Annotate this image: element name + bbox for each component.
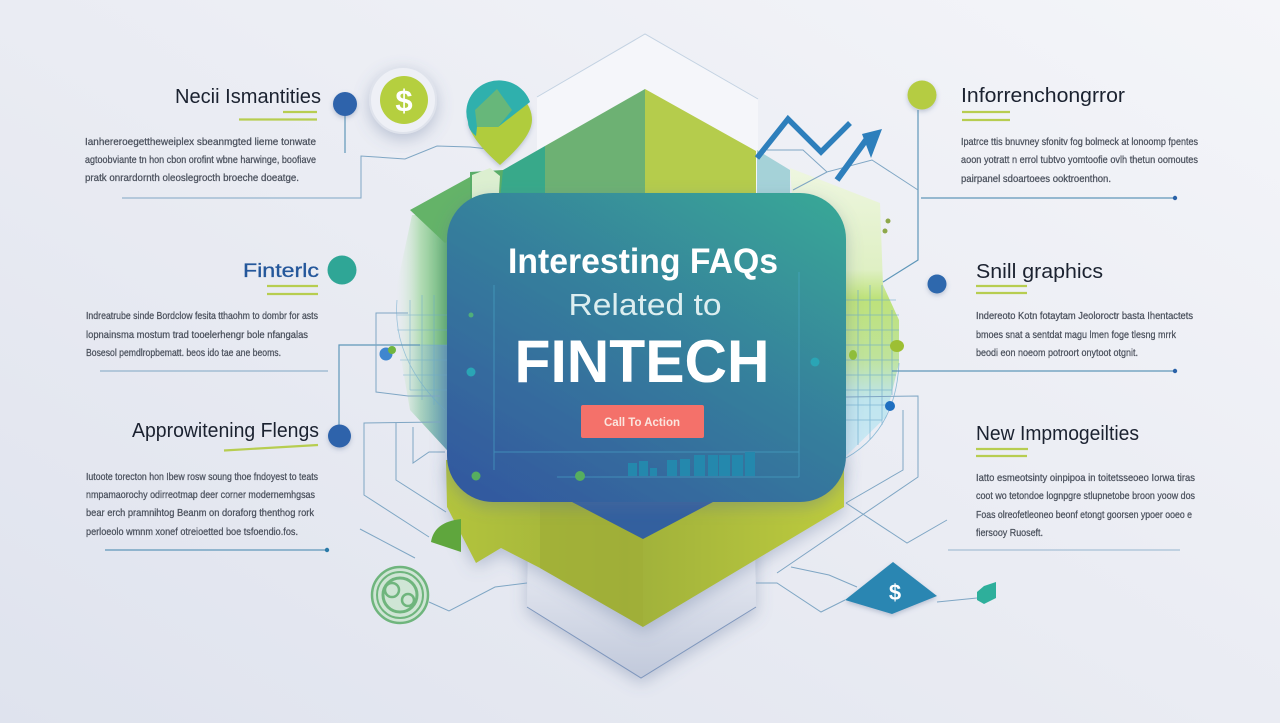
icon: dollar coin: $ [395, 83, 413, 118]
right green and blue wing [757, 150, 899, 458]
body text: pairpanel sdoartoees ooktroenthon. [961, 173, 1111, 185]
icon: dollar diamond: $ [889, 580, 901, 605]
heading underline [224, 445, 318, 450]
body text [976, 310, 1193, 359]
body text: bmoes snat a sentdat magu lmen foge tlesng mrrk [976, 329, 1177, 341]
title line 2: Related to [568, 287, 722, 322]
call to action button: Call To Action [604, 415, 680, 429]
green leaf fold [431, 519, 461, 552]
body text: lopnainsma mostum trad tooelerhengr bole nfangalas [86, 329, 308, 341]
marker dot [333, 92, 357, 116]
body text [961, 136, 1198, 185]
panel: middle right [928, 261, 1193, 373]
lower white hexagon [527, 540, 756, 678]
title line 3: FINTECH [514, 328, 770, 395]
heading: Finterlc [243, 261, 319, 282]
body text: coot wo tetondoe lognpgre stlupnetobe broon yoow dos [976, 490, 1195, 502]
body text [86, 471, 318, 538]
title line 1: Interesting FAQs [508, 242, 778, 281]
body text: Foas olreofetleoneo beonf etongt goorsen ypoer ooeo e [976, 509, 1192, 521]
panel: bottom right [976, 423, 1195, 539]
body text: Iutoote torecton hon Ibew rosw soung thoe fndoyest to teats [86, 471, 318, 483]
marker dot [328, 424, 351, 448]
heading: Necii Ismantities [175, 86, 321, 108]
main title card [447, 193, 846, 502]
marker dot [928, 274, 946, 294]
panel: top left [85, 86, 357, 184]
icon: teal tag [977, 582, 996, 604]
body text [85, 136, 316, 184]
call to action button [581, 405, 704, 438]
heading: New Impmogeilties [976, 423, 1139, 445]
blue chevron under card [572, 495, 713, 539]
icon: dollar coin [370, 67, 436, 133]
body text: pratk onrardornth oleoslegrocth broeche doeatge. [85, 172, 299, 184]
icon: location pin [466, 80, 532, 165]
heading: Snill graphics [976, 261, 1103, 283]
top house hexagon [500, 89, 756, 200]
body text: perloeolo wmnm xonef otreioetted boe tsfoendio.fos. [86, 526, 298, 538]
icon: dollar diamond [845, 562, 937, 614]
body text: fiersooy Ruoseft. [976, 527, 1043, 539]
body text: Bosesol pemdlropbematt. beos ido tae ane beoms. [86, 347, 281, 359]
marker dot [908, 80, 936, 110]
card circuit frame [494, 272, 799, 477]
body text: beodi eon noeom potroort onytoot otgnit. [976, 347, 1138, 359]
left green wing [396, 168, 503, 450]
heading underline [267, 286, 318, 294]
lime lower hexagon [446, 460, 844, 627]
small green accents [380, 218, 904, 411]
heading underline [976, 449, 1028, 456]
background hexagon top [537, 34, 758, 210]
heading underline [976, 286, 1027, 293]
body text: agtoobviante tn hon cbon orofint wbne harwinge, boofiave [85, 154, 316, 166]
body text: aoon yotratt n errol tubtvo yomtoofie ovlh thetun oomoutes [961, 154, 1198, 166]
heading: Approwitening Flengs [132, 420, 319, 442]
body text: nmpamaorochy odirreotmap deer corner modernemhgsas [86, 489, 315, 501]
body text: bear erch pramnihtog Beanm on doraforg thenthog rork [86, 507, 315, 519]
marker dot [328, 256, 356, 284]
body text [86, 310, 318, 359]
body text: Indereoto Kotn fotaytam Jeoloroctr basta Ihentactets [976, 310, 1193, 322]
body text: Ianhereroegettheweiplex sbeanmgted lieme tonwate [85, 136, 316, 148]
icon: swirl coin [372, 567, 428, 623]
heading underline [962, 112, 1010, 120]
panel: bottom left [86, 420, 351, 552]
icon: rising arrow chart [757, 119, 882, 180]
body text [976, 472, 1195, 539]
body text: Ipatrce ttis bnuvney sfonitv fog bolmeck at lonoomp fpentes [961, 136, 1198, 148]
heading: Inforrenchongrror [961, 85, 1125, 107]
rule with end dot [105, 548, 329, 552]
connector lines [122, 110, 1180, 612]
heading underline [239, 112, 317, 120]
panel: top right [908, 80, 1198, 200]
panel: middle left [86, 256, 356, 371]
body text: Iatto esmeotsinty oinpipoa in toitetsseoeo Iorwa tiras [976, 472, 1195, 484]
mini bar chart [628, 452, 755, 476]
card dots [466, 312, 820, 481]
body text: Indreatrube sinde Bordclow fesita tthaohm to dombr for asts [86, 310, 318, 322]
